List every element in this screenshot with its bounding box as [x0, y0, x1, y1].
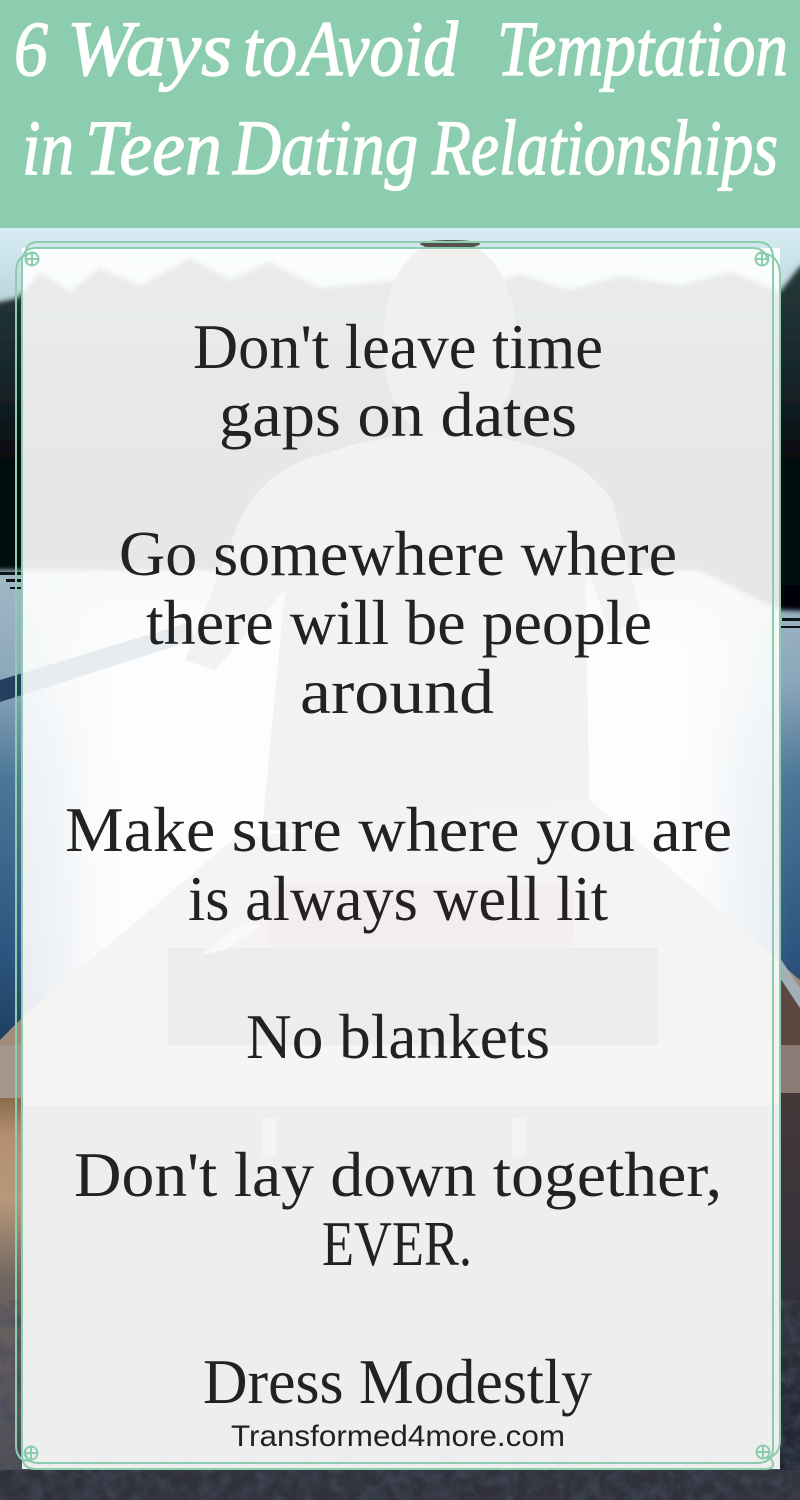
- tip 2: Go somewhere where: [119, 518, 677, 589]
- tip 5: [74, 1139, 722, 1279]
- hair tuft: [420, 240, 480, 248]
- right gunwale band: [780, 958, 800, 1008]
- tip 2: around: [300, 656, 494, 727]
- wooden thwart: [0, 1045, 800, 1107]
- tip 5: EVER.: [322, 1208, 472, 1279]
- tip 4: No blankets: [246, 1001, 550, 1072]
- dark seat area: [168, 948, 658, 1048]
- right hull shadow: [780, 978, 800, 1045]
- tip 3: is always well lit: [188, 863, 608, 934]
- speckle texture: [0, 1300, 800, 1500]
- website credit: Transformed4more.com: [231, 1420, 565, 1453]
- person arm shadow on seat: [200, 925, 262, 955]
- corner knot: top right: [755, 252, 769, 266]
- person head: [383, 240, 517, 440]
- title line 2: Dating: [232, 104, 418, 191]
- decorative knotted frame: [16, 242, 780, 1469]
- corner knot: bottom right: [756, 1445, 770, 1459]
- red cushion: [268, 885, 573, 947]
- title line 1: to: [243, 5, 297, 92]
- title line 2: Teen: [85, 104, 222, 191]
- bright reflection on water: [70, 600, 730, 1040]
- tip 1: Don't leave time: [193, 311, 603, 382]
- canoe hull: [0, 800, 800, 1050]
- tip 5: Don't lay down together,: [74, 1139, 722, 1210]
- left wood edge: [0, 1098, 22, 1470]
- title line 1: Avoid: [296, 5, 459, 92]
- tree line and its dark reflection: [0, 258, 800, 612]
- tip 3: [65, 794, 732, 934]
- corner knot: bottom left: [24, 1446, 38, 1460]
- person torso: [185, 434, 640, 830]
- paddle: [0, 622, 195, 702]
- title line 1: [14, 5, 788, 92]
- corner knot: top left: [25, 252, 39, 266]
- floor pegs: [262, 1118, 526, 1156]
- tip 1: gaps on dates: [219, 379, 577, 450]
- title line 1: Ways: [67, 5, 232, 92]
- lake water: [0, 540, 800, 1050]
- translucent text panel: [22, 248, 780, 1469]
- title line 2: in: [22, 104, 74, 191]
- foreground dark ledge: [0, 1470, 800, 1500]
- canoe floor: [0, 1105, 800, 1470]
- right edge thwart: [780, 1045, 800, 1093]
- water ripples left: [0, 572, 22, 589]
- tip 2: [119, 518, 677, 727]
- title line 1: 6: [14, 5, 48, 92]
- title banner: [0, 0, 800, 228]
- title line 2: [22, 104, 778, 191]
- water ripples right: [780, 618, 800, 628]
- tip 6: Dress Modestly: [203, 1346, 592, 1417]
- tip 2: there will be people: [146, 587, 652, 658]
- tip 3: Make sure where you are: [65, 794, 732, 865]
- tip 1: [193, 311, 603, 450]
- right floor edge: [780, 1093, 800, 1470]
